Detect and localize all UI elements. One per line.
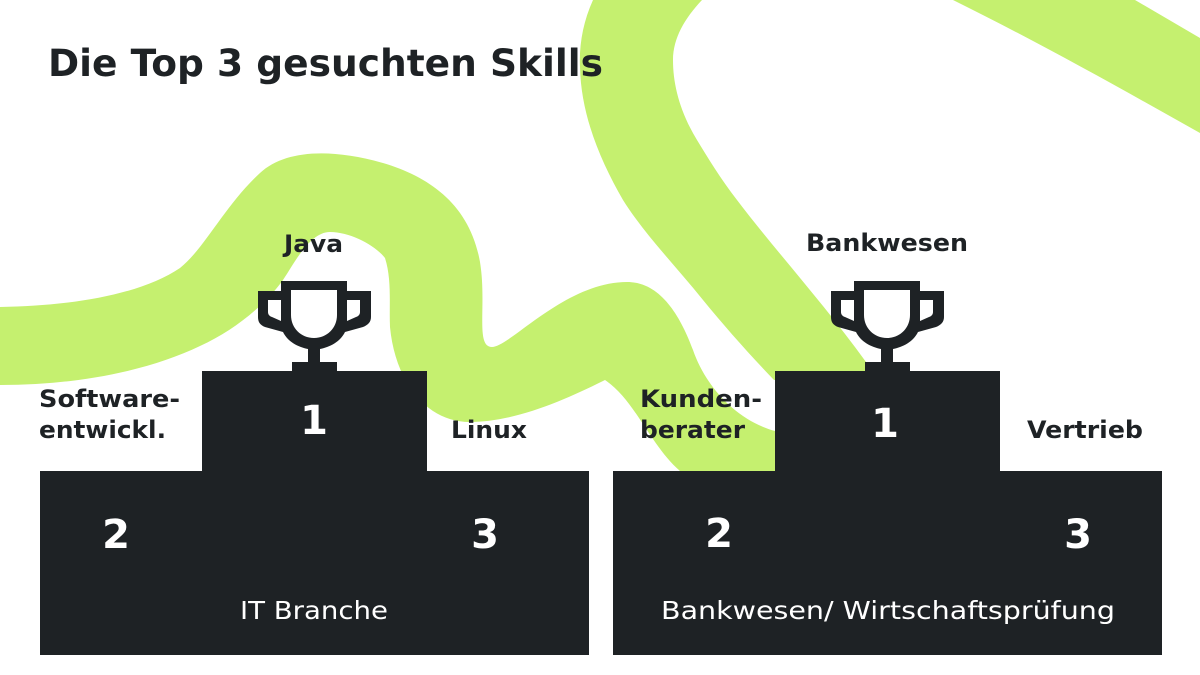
skill: Softwareentwicklung [39,385,180,444]
skill: Softwareentwicklung: entwickl. [39,416,166,444]
skill: Kundenberater: Kunden- [640,385,762,413]
green ribbon: left wave [0,153,780,480]
skill: Bankwesen: Bankwesen [806,229,968,257]
panel: IT Branche podium [40,371,589,655]
rank 2: 2 [102,512,130,558]
podium label: Bankwesen/ Wirtschaftsprüfung [661,596,1115,625]
skill: Linux: Linux [451,416,528,444]
green ribbon: right sweep [580,0,866,380]
rank 1: 1 [300,398,328,444]
icon: trophy right [831,281,944,371]
podium label: IT Branche [240,596,388,625]
rank 3: 3 [1064,512,1092,558]
podium shape [40,371,589,655]
rank 3: 3 [471,512,499,558]
skill: Java: Java [282,230,343,258]
rank 2: 2 [705,511,733,557]
podium shape [613,371,1162,655]
skill: Kundenberater: berater [640,416,745,444]
skill: Softwareentwicklung: Software- [39,385,180,413]
icon: trophy left [258,281,371,371]
rank 1: 1 [871,401,899,447]
title: Die Top 3 gesuchten Skills [48,42,603,85]
skill: Vertrieb: Vertrieb [1027,416,1143,444]
green ribbon: top right band [953,0,1200,133]
panel: Bankwesen podium [613,371,1162,655]
skill: Kundenberater [640,385,762,444]
